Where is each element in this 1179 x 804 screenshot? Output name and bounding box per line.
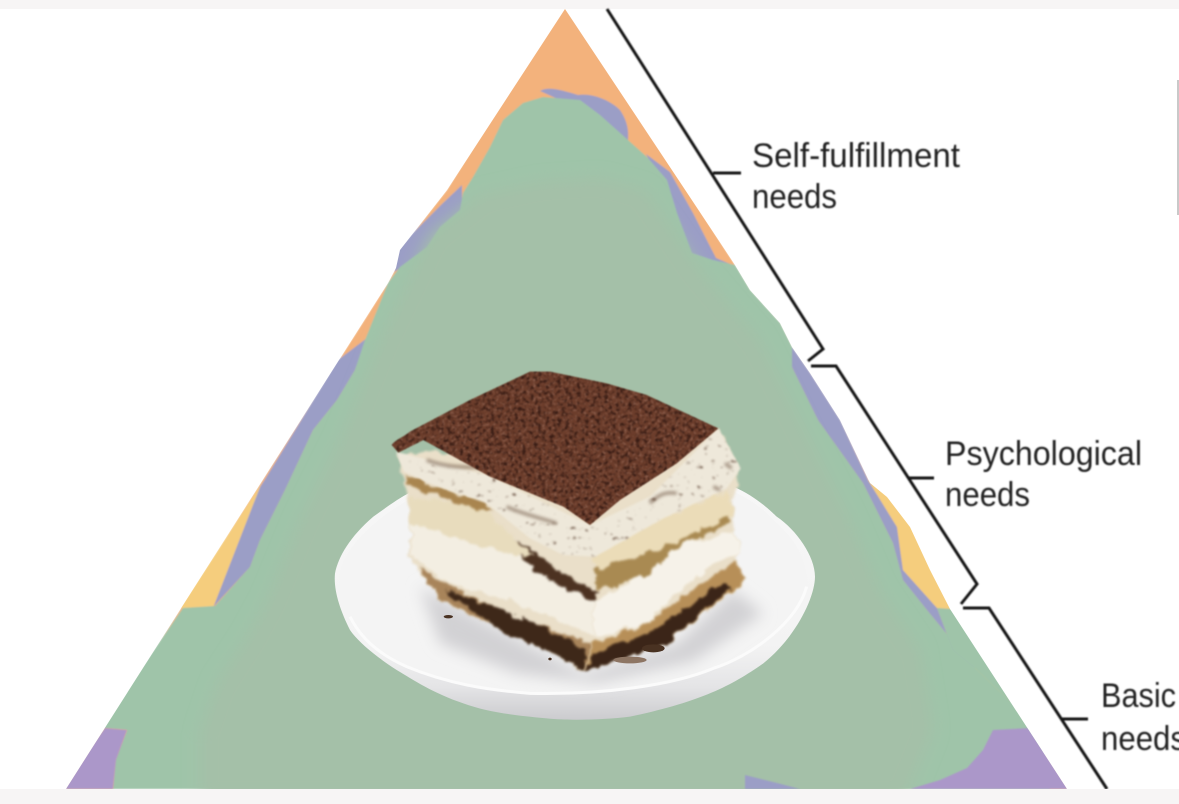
main cream layer right (593, 532, 739, 637)
plate (335, 487, 815, 720)
top cream band (396, 428, 741, 557)
label: psychological needs: Psychological (945, 435, 1142, 473)
lower chocolate sponge left (420, 567, 593, 672)
label: self-fulfillment needs: Self-fulfillment (752, 137, 961, 175)
label: psychological needs (945, 435, 1142, 514)
plate rim line (350, 587, 807, 694)
blue patch at the bottom (745, 775, 800, 789)
plate outer rim (335, 487, 815, 720)
label: self-fulfillment needs: needs (752, 178, 837, 216)
tiramisu on a plate (335, 372, 815, 720)
cocoa-dusted top (392, 372, 718, 525)
tan sponge line (593, 517, 732, 592)
purple corner bottom left (60, 728, 127, 789)
yellow patch on the right (868, 480, 954, 610)
dark soaked sponge band (508, 537, 597, 601)
green wedge on the right edge (936, 608, 1012, 704)
cake body base (398, 428, 745, 672)
blue strip on the lower left (211, 338, 367, 610)
plate top surface (340, 492, 807, 694)
bracket line: self-fulfillment needs (607, 9, 823, 361)
main cream layer left (410, 523, 595, 635)
pale sponge right (593, 490, 733, 568)
darker green centre (200, 178, 933, 800)
blue strip on the upper right (646, 154, 735, 266)
label: basic needs (1101, 677, 1179, 758)
lower sponge right (583, 560, 746, 672)
plate shading in front of the cake (420, 587, 763, 683)
cake slice (392, 372, 746, 672)
purple corner bottom right (910, 728, 1070, 789)
blue patch at the apex (540, 89, 628, 142)
green body (100, 97, 1050, 789)
yellow patch on the left (180, 483, 262, 608)
blue patch on the upper left (394, 185, 462, 272)
crumbs on the plate (444, 615, 665, 663)
blue strip on the right (791, 347, 947, 634)
bracket line: basic needs (963, 608, 1107, 789)
streaks in the cream (427, 460, 732, 523)
right face layers (583, 490, 746, 672)
pale sponge left (410, 497, 537, 557)
label: self-fulfillment needs (752, 137, 961, 216)
tan streak under the top cream (405, 473, 493, 512)
bracket line: psychological needs (811, 366, 977, 604)
top band (0, 0, 1179, 9)
label: psychological needs: needs (945, 476, 1030, 514)
left face layers (405, 473, 597, 672)
bottom band (0, 789, 1179, 804)
cropped edge of a neighbouring element (1177, 80, 1179, 215)
